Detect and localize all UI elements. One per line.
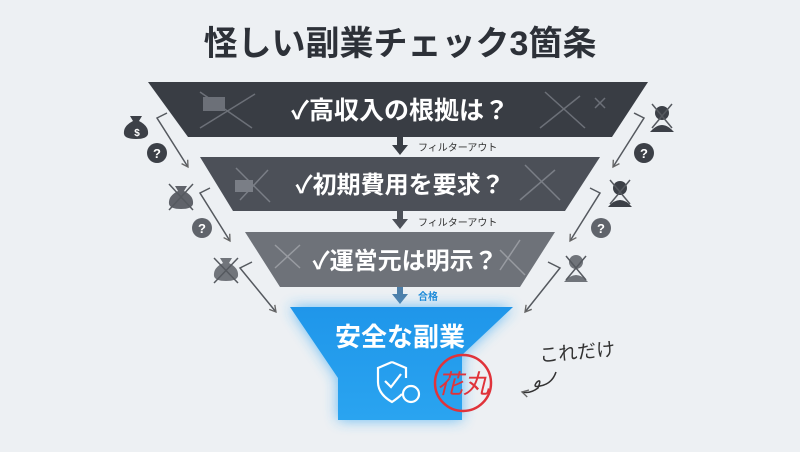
band 2: ✓初期費用を要求？ (295, 172, 505, 199)
stamp: hanamaru: 花丸 (437, 369, 490, 399)
band 3: ✓運営元は明示？ (312, 248, 498, 275)
arrow 3 (392, 287, 438, 304)
left icons and arrows: ? (153, 146, 161, 161)
band 1: ✓高収入の根拠は？ (291, 97, 509, 125)
title: 怪しい副業チェック3箇条 (204, 25, 596, 63)
safe side job box (290, 307, 513, 420)
left icons and arrows: ? (198, 221, 206, 236)
left icons and arrows (124, 116, 238, 281)
band 3 (245, 232, 555, 287)
arrow 1: フィルターアウト (418, 142, 497, 154)
band 1 (148, 82, 648, 137)
stamp: hanamaru (435, 355, 491, 411)
icon: shield (378, 362, 419, 402)
arrow 2 (392, 211, 497, 229)
right icons and arrows: ? (597, 221, 605, 236)
handwritten note: これだけ (539, 339, 616, 367)
arrow 2: フィルターアウト (418, 217, 497, 229)
right icons and arrows: ? (640, 146, 648, 161)
handwritten note (522, 339, 616, 392)
safe side job box: 安全な副業 (335, 322, 465, 352)
arrow 1 (392, 137, 497, 155)
band 2 (200, 157, 600, 211)
arrow 3: 合格 (418, 290, 438, 303)
left icons and arrows: $ (134, 128, 140, 139)
right icons and arrows (564, 106, 674, 282)
